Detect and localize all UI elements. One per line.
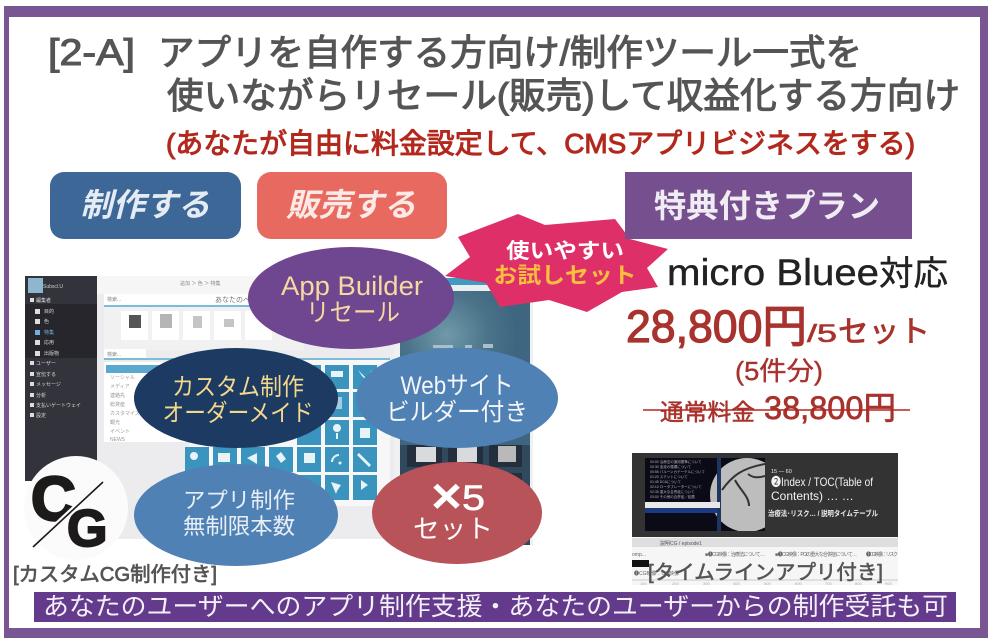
regular price (643, 390, 910, 426)
ellipse: App Builder resale: App Builder (281, 271, 423, 301)
button: 販売する: 販売する (286, 187, 416, 223)
timeline app screenshot: 03:00 その他の合併症／処置 (650, 494, 695, 499)
logo: CG (24, 456, 128, 560)
timeline app screenshot: 900 (885, 581, 892, 586)
sidebar: 編集者 (36, 297, 51, 304)
button: 販売する (257, 172, 447, 239)
sidebar: 分析 (36, 392, 46, 399)
timeline app screenshot: 300 (703, 581, 710, 586)
ellipse: App Builder resale (248, 247, 454, 349)
timeline app screenshot: 02:10 ロータブレーターについて (650, 484, 702, 489)
sidebar: Subscl.U (43, 284, 63, 290)
timeline app screenshot (632, 453, 898, 586)
price: /5 (807, 320, 837, 348)
timeline app screenshot: 600 (795, 581, 802, 586)
timeline app screenshot: ❶CG映像：CG映像 (634, 570, 679, 577)
sidebar: 応用 (44, 340, 54, 346)
plan heading: 特典付きプラン (654, 188, 880, 224)
app builder screenshot: カスタマイズ (110, 410, 140, 417)
timeline app screenshot: 00:00 治療法の適用基準について (650, 459, 702, 464)
price: 28,800円 (626, 301, 807, 352)
price note: (5件分) (735, 356, 823, 386)
app builder screenshot: 追加 ＞ 色 ＞ 特集 (180, 280, 221, 287)
starburst badge: 使いやすい (506, 240, 624, 263)
timeline app screenshot: 00:30 血液の循環について (650, 464, 692, 469)
ellipse: times five sets: セット (413, 514, 493, 544)
ellipse: times five sets (372, 462, 542, 564)
timeline app screenshot: omp... (632, 552, 646, 558)
top panels (97, 276, 397, 294)
timeline app screenshot: Contents) … … (771, 489, 854, 503)
teal tiles (185, 365, 377, 500)
timeline app screenshot: ❷Index / TOC(Table of (771, 475, 874, 489)
app builder screenshot: 連絡先 (110, 392, 125, 399)
app builder screenshot: イベント (110, 429, 130, 435)
ellipse: App Builder resale: リセール (306, 299, 400, 327)
caption: timeline app: [タイムラインアプリ付き] (648, 561, 883, 584)
bottom banner: あなたのユーザーへのアプリ制作支援・あなたのユーザーからの制作受託も可 (43, 593, 948, 621)
timeline app screenshot: 200 (672, 581, 679, 586)
regular price: 38,800円 (764, 390, 896, 426)
button: 制作する: 制作する (80, 187, 210, 223)
subtitle: (あなたが自由に料金設定して、CMSアプリビジネスをする) (166, 128, 915, 159)
ellipse: unlimited apps: アプリ制作 (183, 488, 295, 513)
price: セット (838, 316, 930, 349)
ellipse: website builder (356, 348, 558, 448)
app builder screenshot: あなたのページ (215, 296, 264, 304)
ellipse: website builder: ビルダー付き (386, 399, 528, 426)
sidebar: 宣伝する (36, 371, 56, 378)
ellipse: custom made: オーダーメイド (162, 400, 314, 427)
product name: 対応 (879, 255, 948, 293)
price (626, 301, 930, 352)
sidebar: 出版物 (44, 350, 59, 357)
title (48, 32, 960, 116)
timeline app screenshot: 01:45 DCAについて (650, 480, 682, 484)
sidebar: 色 (44, 318, 49, 325)
ellipse: times five sets: 5 (462, 479, 485, 518)
timeline app screenshot: 15 — 60 (771, 469, 792, 475)
ellipse: custom made (134, 348, 338, 448)
caption: custom CG: [カスタムCG制作付き] (13, 563, 217, 586)
app builder screenshot: メディア (110, 383, 130, 390)
app builder screenshot: 検索... (107, 351, 121, 358)
sidebar (25, 276, 97, 481)
sidebar: ユーザー (36, 361, 56, 367)
ellipse: custom made: カスタム制作 (172, 374, 304, 401)
timeline app screenshot: 100 (640, 581, 647, 586)
timeline app screenshot: 500 (764, 581, 771, 586)
timeline app screenshot: ❶CG映像：リスク (866, 551, 898, 558)
product name: micro Bluee (667, 252, 879, 293)
timeline app screenshot: 400 (733, 581, 740, 586)
phone preview (394, 278, 533, 545)
app builder screenshot: ソーシャル (110, 375, 135, 381)
app builder screenshot: 観光 (110, 419, 120, 426)
logo: CG: G (67, 500, 107, 558)
ellipse: website builder: Webサイト (400, 372, 514, 400)
app builder screenshot: 検索... (107, 296, 121, 303)
plan heading (625, 172, 912, 239)
sidebar: 支払いゲートウェイ (36, 402, 81, 409)
logo: CG: C (31, 465, 76, 534)
timeline app screenshot: 治療法･リスク… / 説明タイムテーブル (768, 508, 878, 518)
sidebar: メッセージ (36, 382, 61, 388)
regular price: 通常料金 (660, 399, 755, 425)
title: 使いながらリセール(販売)して収益化する方向け (167, 75, 960, 116)
timeline app screenshot: 02:35 重大な合併症について (650, 489, 695, 494)
sidebar: 目的 (44, 308, 54, 315)
timeline app screenshot: ■ ❶CG映像：治療法について… (705, 551, 765, 558)
timeline app screenshot: 00:55 バルーンカテーテルについて (650, 469, 705, 474)
starburst badge (445, 214, 668, 312)
starburst badge: お試しセット (494, 263, 636, 288)
ellipse: unlimited apps: 無制限本数 (183, 514, 295, 539)
timeline app screenshot: 800 (855, 581, 862, 586)
title: アプリを自作する方向け/制作ツール一式を (158, 32, 862, 73)
button: 制作する (50, 172, 241, 239)
product name (667, 252, 948, 293)
timeline app screenshot: 01:20 ステントについて (650, 474, 688, 479)
ellipse: times five sets: × (431, 468, 462, 524)
ellipse: unlimited apps (134, 464, 338, 566)
app builder screenshot: 総資産 (110, 401, 125, 408)
sidebar: 特集 (44, 329, 54, 336)
timeline app screenshot: 説明CG / episode1 (660, 540, 702, 547)
timeline app screenshot: ■ ❶CG映像：PCIの重大な合併症について… (775, 551, 857, 558)
app builder screenshot: NEWS (110, 437, 126, 443)
timeline app screenshot: 700 (825, 581, 832, 586)
sidebar: 設定 (36, 412, 46, 419)
title: [2-A] (48, 32, 135, 73)
app builder screenshot (25, 276, 533, 545)
